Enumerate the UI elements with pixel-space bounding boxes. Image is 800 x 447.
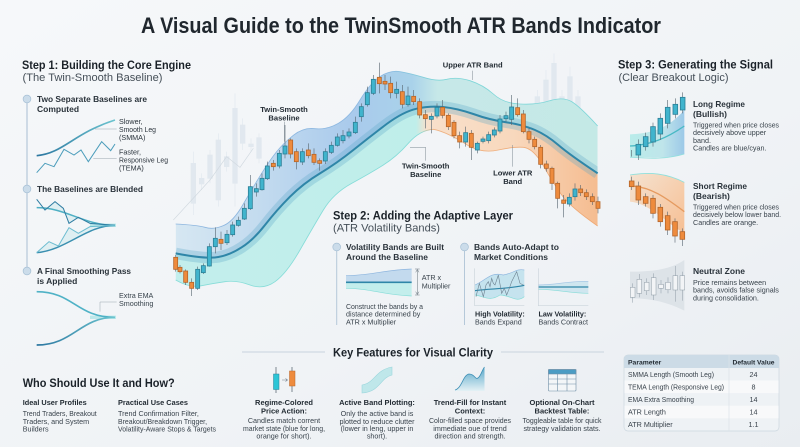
icon: active band xyxy=(362,367,392,393)
cyan long candles xyxy=(196,79,577,288)
feature: regime-colored: Candles match corrent xyxy=(248,416,320,425)
label: lower ATR band: Band xyxy=(503,177,523,186)
chart: low volatility xyxy=(538,268,588,306)
text: bands auto-adapt: Bands Auto-Adapt to xyxy=(474,242,559,252)
upper band fill xyxy=(176,72,598,256)
label: twin-smooth baseline top xyxy=(260,105,308,122)
feature: active band: Only the active band is xyxy=(341,409,414,418)
label: extra EMA xyxy=(119,291,154,308)
text: final smoothing xyxy=(37,266,131,286)
step 1 heading xyxy=(22,58,191,84)
text: long regime: Long Regime xyxy=(693,99,745,109)
background ghost candles xyxy=(173,53,580,220)
table rows: SMMA Length (Smooth Leg) xyxy=(628,370,714,379)
label: lower ATR band: Lower ATR xyxy=(493,168,533,178)
text: baselines blended: The Baselines are Blended xyxy=(37,184,143,194)
table rows: ATR Length xyxy=(628,408,666,417)
twin-smooth baseline line xyxy=(176,107,598,258)
feature: backtest table: Optional On-Chart xyxy=(530,398,595,407)
step 3 heading: Step 3: Generating the Signal xyxy=(618,58,773,72)
text: construct the bands: Construct the bands by a xyxy=(346,302,423,311)
icon: regime candles xyxy=(274,367,295,393)
ideal user profiles: Traders, and System xyxy=(23,417,89,426)
title: A Visual Guide to the TwinSmooth ATR Bands Indicator xyxy=(141,13,661,38)
table rows: 14 xyxy=(750,395,758,404)
text: long regime: band. xyxy=(693,136,711,145)
diagram: ATR multiplier band xyxy=(346,269,420,296)
icon: table xyxy=(548,370,576,391)
text: short regime: Triggered when price closes xyxy=(693,202,779,212)
table rows: 14 xyxy=(750,408,758,417)
table rows xyxy=(628,370,758,429)
labels: legs: Slower, xyxy=(119,117,143,126)
feature: active band: Active Band Plotting: xyxy=(339,398,415,407)
label: extra EMA: Smoothing xyxy=(119,299,153,308)
labels: legs: Faster, xyxy=(119,148,141,156)
text: final smoothing: A Final Smoothing Pass xyxy=(37,266,131,276)
icon: neutral chart xyxy=(630,260,685,311)
practical use cases: Volatility-Aware Stops & Targets xyxy=(118,424,216,434)
step 1 timeline xyxy=(23,95,31,275)
practical use cases: Trend Confirmation Filter, xyxy=(118,409,199,418)
text: neutral zone: Neutral Zone xyxy=(693,266,745,276)
feature: trend fill: Color-filled space provides xyxy=(429,416,511,425)
upper ATR band edge xyxy=(176,71,598,228)
connector lines xyxy=(284,71,513,167)
table header: Parameter xyxy=(628,359,662,366)
text: short regime: Candles are orange. xyxy=(693,218,758,227)
practical use cases: Practical Use Cases xyxy=(118,398,188,407)
icon: long regime chart xyxy=(630,92,685,160)
feature: regime-colored: Price Action: xyxy=(261,406,307,416)
labels: legs xyxy=(119,117,168,172)
feature: active band: plotted to reduce clutter xyxy=(339,417,415,426)
text: bands built xyxy=(346,242,444,262)
main chart: candles and ATR bands xyxy=(173,54,600,296)
panel: step 1 xyxy=(22,58,191,345)
step 2 timelines xyxy=(333,243,468,325)
feature: regime-colored xyxy=(243,398,325,440)
step 1 heading: Step 1: Building the Core Engine xyxy=(22,58,191,72)
labels: legs: (SMMA) xyxy=(119,133,145,142)
label: low volatility xyxy=(538,310,588,326)
label: twin-smooth baseline lower: Baseline xyxy=(410,170,441,179)
diagram: two baselines xyxy=(37,120,117,173)
diagram: blending xyxy=(37,199,116,253)
labels: legs: Responsive Leg xyxy=(119,156,168,164)
orange short candles xyxy=(174,77,600,288)
panel: step 2 xyxy=(333,208,588,326)
text: bands built: Volatility Bands are Built xyxy=(346,242,444,252)
table rows: TEMA Length (Responsive Leg) xyxy=(628,382,724,391)
feature: regime-colored: orange for short). xyxy=(256,432,312,440)
text: long regime: Candles are blue/cyan. xyxy=(693,144,767,152)
key features heading: Key Features for Visual Clarity xyxy=(333,346,493,360)
feature: active band xyxy=(339,398,415,440)
text: bands auto-adapt xyxy=(474,242,559,262)
text: neutral zone: Price remains between xyxy=(693,278,766,287)
icon: short regime chart xyxy=(629,173,685,246)
feature: regime-colored: Regime-Colored xyxy=(255,398,313,407)
ideal user profiles xyxy=(23,398,97,434)
feature: trend fill: Context: xyxy=(455,406,485,416)
label: low volatility: Bands Contract xyxy=(538,318,588,326)
text: two separate baselines: Two Separate Baselines are xyxy=(37,94,147,104)
label: high volatility xyxy=(475,310,525,326)
ideal user profiles: Ideal User Profiles xyxy=(23,398,87,407)
label: high volatility: Bands Expand xyxy=(475,318,522,326)
practical use cases xyxy=(118,398,216,434)
text: long regime: decisively above upper xyxy=(693,128,767,137)
label: twin-smooth baseline top: Twin-Smooth xyxy=(260,105,308,114)
table rows: ATR Multiplier xyxy=(628,420,673,429)
feature: active band: short). xyxy=(367,432,387,440)
text: two separate baselines: Computed xyxy=(37,104,79,114)
text: long regime: Triggered when price closes xyxy=(693,120,779,130)
practical use cases: Breakout/Breakdown Trigger, xyxy=(118,417,207,426)
text: short regime: decisively below lower band. xyxy=(693,210,781,219)
ideal user profiles: Builders xyxy=(23,424,49,434)
feature: active band: (lower in leng, upper in xyxy=(341,424,413,433)
lower band fill xyxy=(176,108,598,286)
text: two separate baselines xyxy=(37,94,147,114)
chart: high volatility xyxy=(475,268,524,306)
feature: backtest table: Toggleable table for quick xyxy=(522,416,602,425)
text: short regime xyxy=(693,181,781,227)
label: high volatility: High Volatility: xyxy=(475,310,525,318)
table: default parameters xyxy=(624,355,779,431)
label: low volatility: Law Volatility: xyxy=(538,310,586,318)
diagram: final smoothing xyxy=(37,292,117,345)
feature: trend fill: Trend-Fill for Instant xyxy=(434,398,507,407)
table rows: EMA Extra Smoothing xyxy=(628,395,694,404)
feature: backtest table xyxy=(522,398,602,433)
step 3 heading: (Clear Breakout Logic) xyxy=(618,72,728,84)
feature: backtest table: Backtest Table: xyxy=(535,406,589,416)
table rows: 8 xyxy=(752,382,756,391)
text: long regime xyxy=(693,99,779,152)
text: bands auto-adapt: Market Conditions xyxy=(474,252,548,262)
candle wicks xyxy=(176,63,598,296)
step 2 heading: Step 2: Adding the Adaptive Layer xyxy=(333,208,513,222)
feature: regime-colored: market state (blue for long, xyxy=(243,424,325,433)
baseline halo xyxy=(176,107,598,258)
table rows: 1.1 xyxy=(748,420,758,429)
panel: who should use it xyxy=(23,376,216,434)
step 1 heading: (The Twin-Smooth Baseline) xyxy=(22,72,163,84)
label: twin-smooth baseline top: Baseline xyxy=(268,114,300,122)
label: upper ATR band: Upper ATR Band xyxy=(443,60,503,70)
labels: legs: Smooth Leg xyxy=(119,125,156,134)
text: short regime: (Bearish) xyxy=(693,191,730,201)
text: construct the bands xyxy=(346,302,423,326)
table header xyxy=(628,359,775,366)
feature: trend fill: direction and strength. xyxy=(434,432,506,440)
text: short regime: Short Regime xyxy=(693,181,747,191)
label: twin-smooth baseline lower xyxy=(402,162,450,179)
label: ATR multiplier xyxy=(422,273,451,290)
panel: step 3 xyxy=(618,58,781,311)
label: lower ATR band xyxy=(493,168,533,186)
ideal user profiles: Trend Traders, Breakout xyxy=(23,409,97,418)
step 2 heading: (ATR Volatility Bands) xyxy=(333,222,440,234)
icon: trend fill xyxy=(455,367,484,391)
label: ATR multiplier: ATR x xyxy=(422,273,442,282)
text: neutral zone: bands, avoids false signals xyxy=(693,286,779,294)
table rows: 24 xyxy=(750,370,758,379)
feature: trend fill: immediate oue of trend xyxy=(433,424,507,433)
step 3 heading xyxy=(618,58,773,84)
text: final smoothing: is Applied xyxy=(37,276,77,286)
text: neutral zone xyxy=(693,266,779,302)
text: construct the bands: ATR x Multiplier xyxy=(346,318,397,326)
label: twin-smooth baseline lower: Twin-Smooth xyxy=(402,162,450,170)
text: bands built: Around the Baseline xyxy=(346,252,428,262)
who heading: Who Should Use It and How? xyxy=(23,376,175,390)
feature: trend fill xyxy=(429,398,511,440)
text: long regime: (Bullish) xyxy=(693,109,727,119)
lower ATR band edge xyxy=(176,129,598,287)
text: neutral zone: during consolidation. xyxy=(693,294,759,302)
labels: legs: (TEMA) xyxy=(119,164,144,172)
table header: Default Value xyxy=(732,359,775,366)
panel: key features xyxy=(242,346,604,440)
label: extra EMA: Extra EMA xyxy=(119,291,154,300)
feature: backtest table: strategy validation stats. xyxy=(523,424,601,433)
step 2 heading xyxy=(333,208,513,234)
label: ATR multiplier: Multiplier xyxy=(422,282,451,290)
text: construct the bands: distance determined by xyxy=(346,310,421,318)
